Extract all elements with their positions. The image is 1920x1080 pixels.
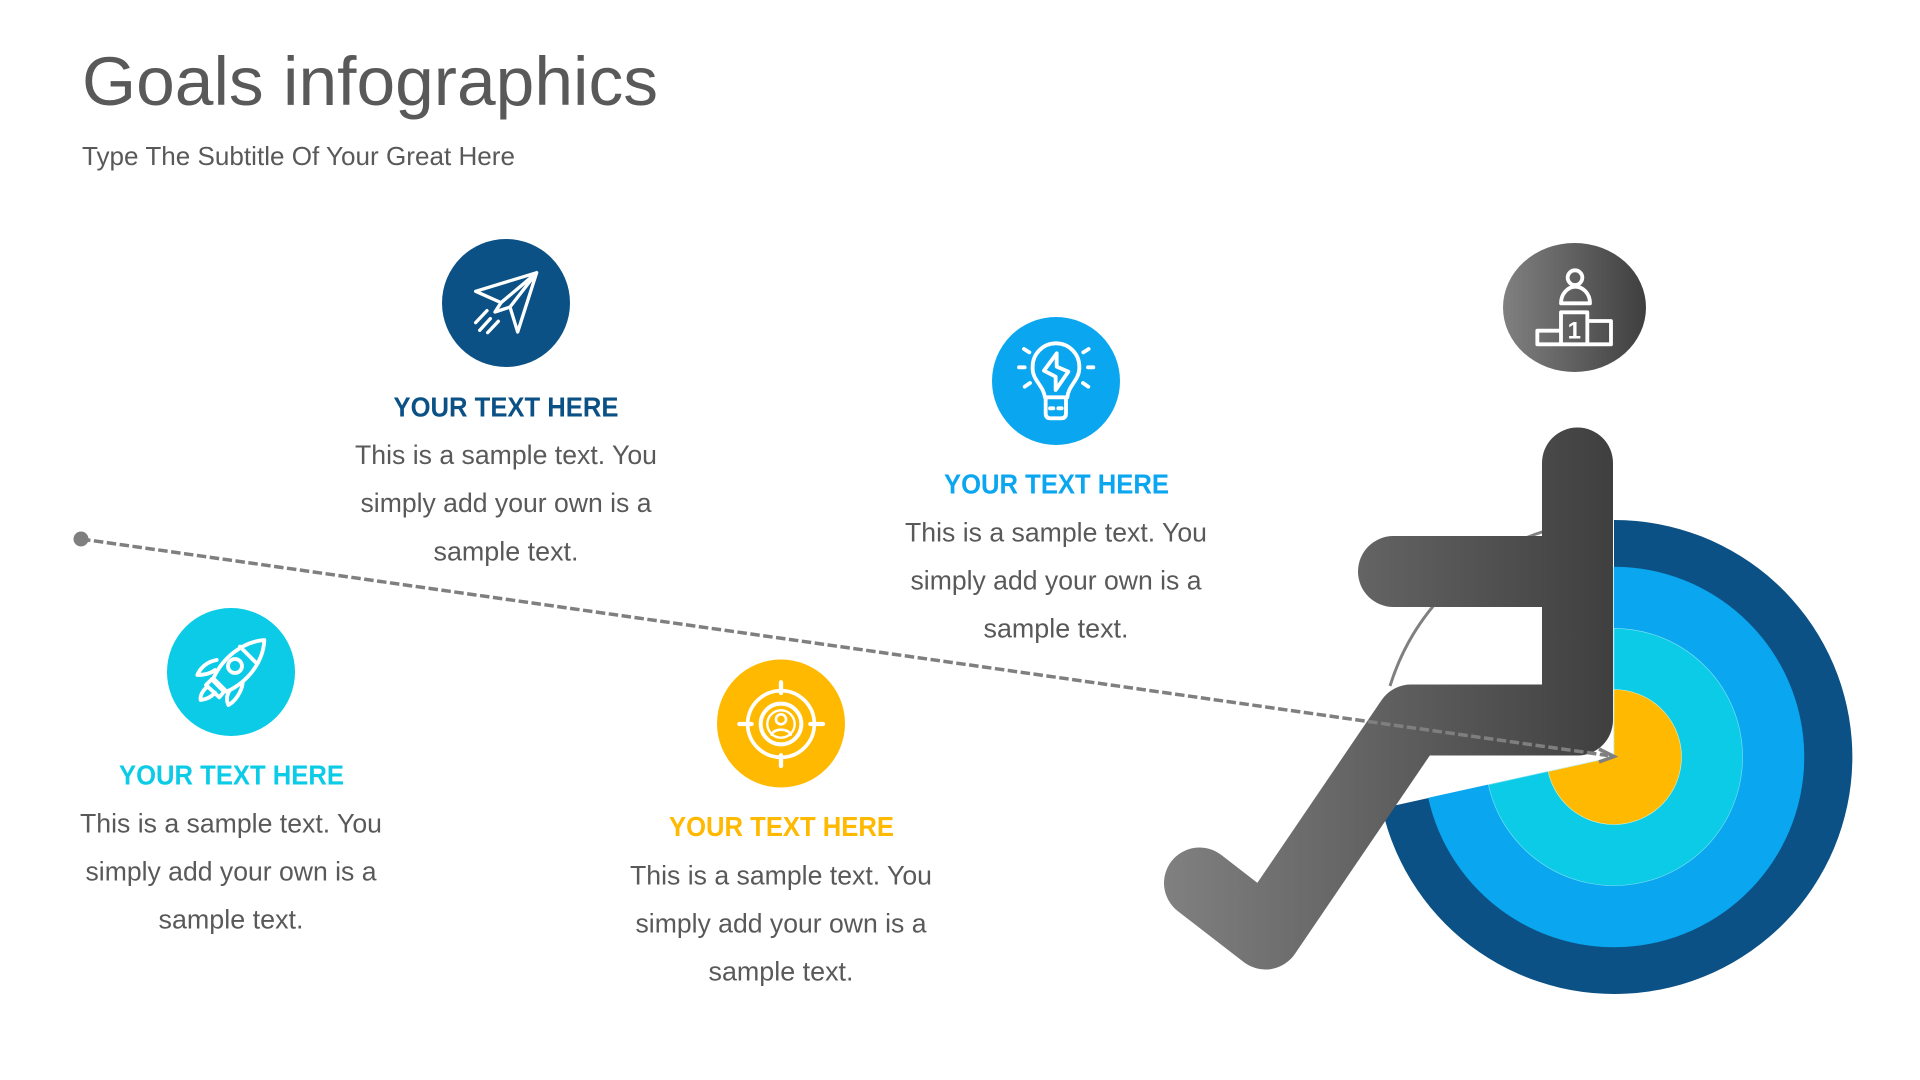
title: Goals infographics <box>82 43 658 120</box>
icon: podium badge <box>1503 243 1646 372</box>
panel: step blue <box>905 317 1207 644</box>
wheel: concentric target <box>1382 520 1852 994</box>
dashed arrow <box>74 532 1614 762</box>
icon: podium badge: 1 <box>1568 317 1581 344</box>
icon: rocket <box>167 608 295 736</box>
wheel: thin arc <box>1390 531 1545 686</box>
text block: navy: sample text. <box>434 536 578 566</box>
panel: step yellow <box>630 660 932 986</box>
heading: yellow: YOUR TEXT HERE <box>669 811 894 842</box>
text block: cyan: sample text. <box>158 905 304 935</box>
text block: blue <box>905 517 1207 644</box>
subtitle: Type The Subtitle Of Your Great Here <box>82 141 515 171</box>
text block: yellow: This is a sample text. You <box>630 860 932 890</box>
icon: target person <box>717 660 845 788</box>
text block: blue: simply add your own is a <box>910 566 1202 596</box>
text block: cyan: This is a sample text. You <box>80 809 382 839</box>
text block: blue: sample text. <box>984 614 1128 644</box>
text block: yellow: simply add your own is a <box>636 909 927 939</box>
icon: light bulb <box>992 317 1120 445</box>
text block: yellow: sample text. <box>708 956 854 986</box>
panel: step cyan <box>80 608 382 935</box>
text block: cyan <box>80 809 382 935</box>
text block: blue: This is a sample text. You <box>905 517 1207 547</box>
heading: blue: YOUR TEXT HERE <box>944 468 1169 500</box>
panel: step navy <box>355 239 657 566</box>
text block: yellow <box>630 860 932 986</box>
text block: navy: simply add your own is a <box>360 488 652 518</box>
wheelchair figure <box>1200 463 1578 934</box>
text block: navy <box>355 440 657 566</box>
heading: cyan: YOUR TEXT HERE <box>119 760 344 790</box>
icon: paper plane <box>442 239 570 367</box>
text block: navy: This is a sample text. You <box>355 440 657 470</box>
heading: navy: YOUR TEXT HERE <box>394 392 618 422</box>
text block: cyan: simply add your own is a <box>86 857 377 887</box>
